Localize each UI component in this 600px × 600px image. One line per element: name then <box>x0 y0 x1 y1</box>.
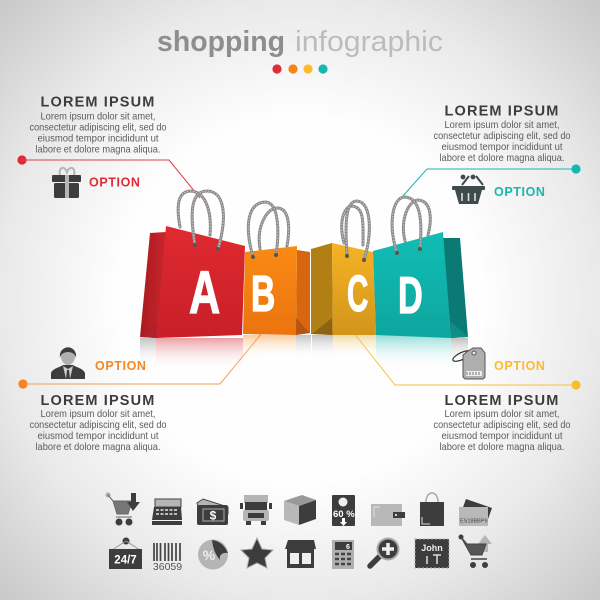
icon: wallet <box>371 504 405 526</box>
text block: top right: consectetur adipiscing elit, sed do <box>434 131 571 142</box>
text block: top right <box>434 104 571 164</box>
bag B: B <box>251 266 275 323</box>
text block: top right: LOREM IPSUM <box>445 104 559 120</box>
title: shopping <box>157 26 285 58</box>
text block: top left: eiusmod tempor incididunt ut <box>38 134 159 144</box>
icon row 1 <box>106 492 492 526</box>
text block: bottom left: consectetur adipiscing elit, sed do <box>30 420 167 431</box>
text block: bottom right: LOREM IPSUM <box>445 393 559 409</box>
text block: bottom left: LOREM IPSUM <box>41 393 155 409</box>
icon: credit card: ES18BBP9 <box>460 518 488 524</box>
connector: red <box>17 155 200 198</box>
icon: name label <box>415 539 449 568</box>
connector: yellow <box>353 332 581 390</box>
icon: door hanger <box>332 495 355 526</box>
icon row 2 <box>109 534 492 573</box>
text block: top left <box>30 94 167 156</box>
label: option teal: OPTION <box>494 185 546 199</box>
label: option orange: OPTION <box>95 359 147 373</box>
icon: barcode <box>153 543 182 573</box>
icon: truck <box>240 495 272 525</box>
icon: percent sticker: % <box>203 547 216 563</box>
bag B <box>243 202 310 335</box>
text block: bottom right: eiusmod tempor incididunt ut <box>442 431 563 442</box>
text block: top left: consectetur adipiscing elit, sed do <box>30 122 167 134</box>
bag C <box>311 201 376 335</box>
text block: top right: Lorem ipsum dolor sit amet, <box>444 120 560 131</box>
icon: basket <box>452 175 485 204</box>
text block: bottom left: eiusmod tempor incididunt ut <box>38 431 159 442</box>
bag A: A <box>189 260 220 327</box>
text block: bottom right: Lorem ipsum dolor sit amet, <box>444 409 560 420</box>
icon: banknotes: $ <box>210 508 217 522</box>
text block: top left: labore et dolore magna aliqua. <box>36 144 160 156</box>
title <box>157 26 443 58</box>
text block: bottom left: labore et dolore magna aliqua. <box>36 442 160 453</box>
icon: cart upload <box>458 534 492 568</box>
icon: credit card <box>459 499 492 526</box>
icon: shopping bag <box>420 493 444 526</box>
connector: orange <box>18 333 262 389</box>
icon: barcode: 36059 <box>153 561 182 573</box>
bag A <box>140 191 245 338</box>
label: option red: OPTION <box>89 176 141 190</box>
icon: magnifier <box>370 538 398 566</box>
icon: box <box>284 495 316 525</box>
icon: banknotes <box>197 499 228 525</box>
icon: door hanger: 60 % <box>333 509 355 520</box>
icon: price tag <box>451 348 485 379</box>
title colour dots <box>272 64 328 74</box>
icon: 24/7 sign <box>109 538 142 569</box>
icon: 24/7 sign: 24/7 <box>114 554 137 566</box>
icon: cash register <box>152 499 182 525</box>
icon: calculator <box>332 540 354 569</box>
icon: businessman <box>51 347 85 379</box>
text block: bottom right <box>434 393 571 453</box>
bag reflections <box>140 335 468 370</box>
icon: cart download <box>106 492 140 526</box>
text block: bottom left <box>30 393 167 453</box>
text block: top left: LOREM IPSUM <box>41 94 155 110</box>
text block: bottom left: Lorem ipsum dolor sit amet, <box>40 409 156 420</box>
icon: percent sticker <box>198 540 228 570</box>
text block: top left: Lorem ipsum dolor sit amet, <box>40 112 156 122</box>
text block: top right: eiusmod tempor incididunt ut <box>442 142 563 153</box>
icon: storefront <box>285 540 316 568</box>
title: infographic <box>295 26 443 58</box>
bag C: C <box>347 265 368 322</box>
text block: top right: labore et dolore magna aliqua. <box>440 153 564 164</box>
connector: teal <box>402 164 581 197</box>
bag D: D <box>398 267 423 325</box>
icon: star <box>241 538 273 568</box>
icon: calculator: 6 <box>346 544 350 551</box>
icon: gift <box>52 168 81 198</box>
label: option yellow: OPTION <box>494 359 546 373</box>
bag D <box>373 197 468 338</box>
icon: name label: John <box>421 543 443 553</box>
text block: bottom right: consectetur adipiscing elit, sed do <box>434 420 571 431</box>
text block: bottom right: labore et dolore magna aliqua. <box>440 442 564 453</box>
